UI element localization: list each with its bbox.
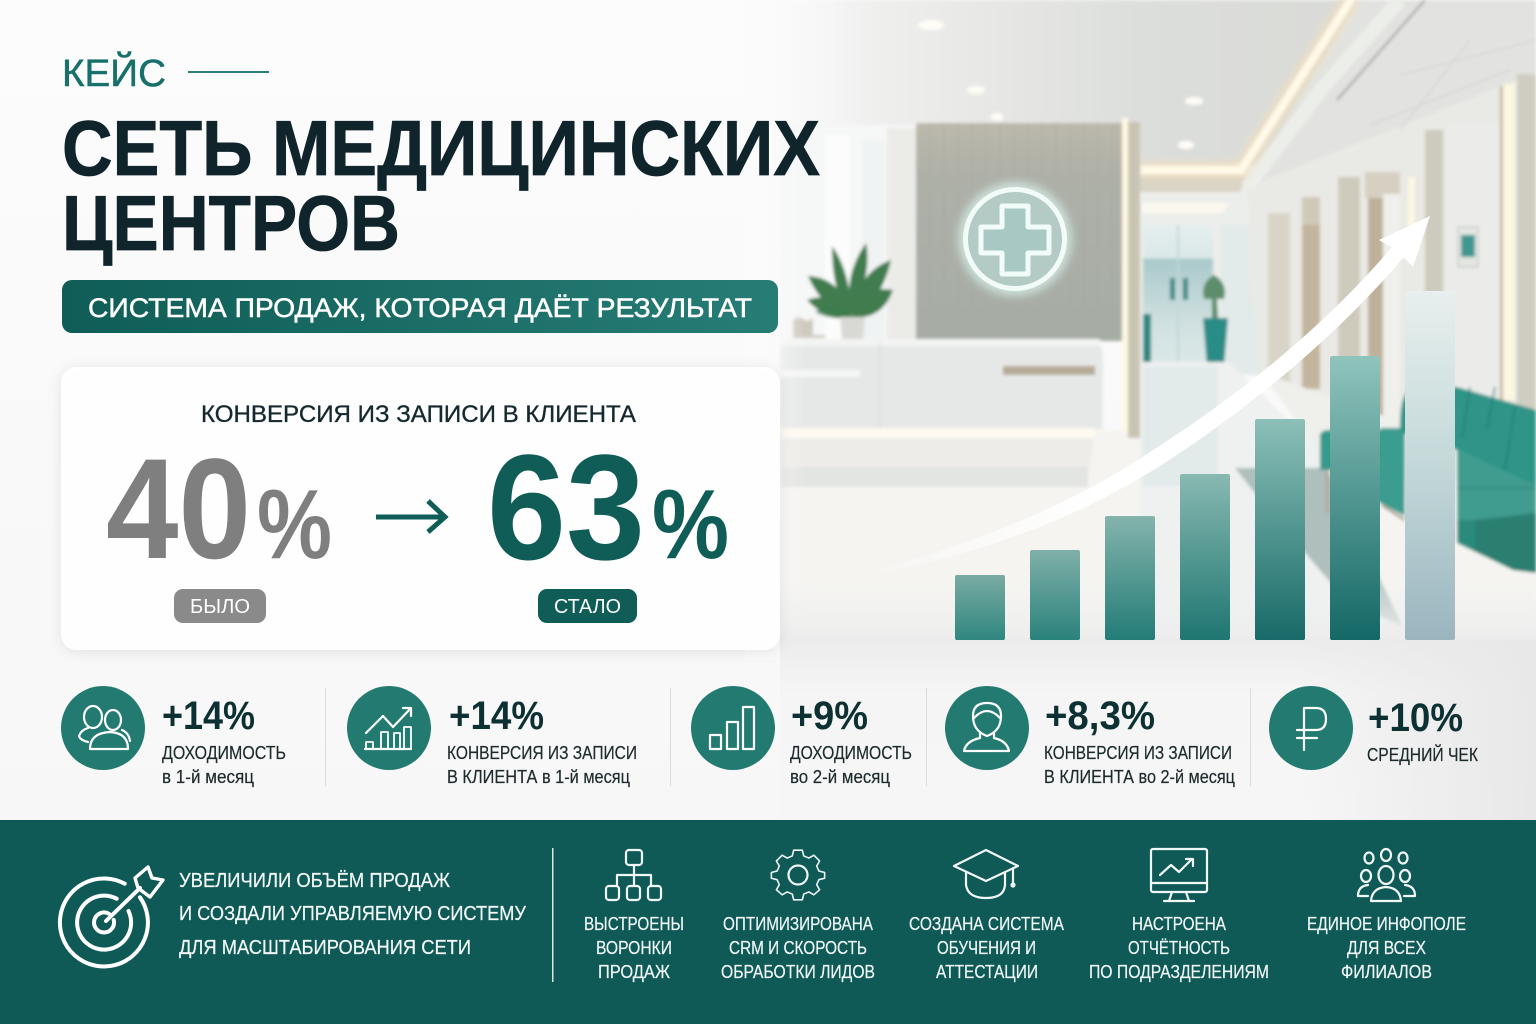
conversion heading: КОНВЕРСИЯ ИЗ ЗАПИСИ В КЛИЕНТА (201, 401, 636, 428)
icon: person (964, 703, 1009, 751)
item: sales funnels (584, 850, 684, 982)
heading label: case: КЕЙС (62, 50, 166, 95)
stat: conversion month 1: +14% (449, 694, 544, 738)
footer summary (179, 870, 526, 959)
stat: conversion month 2: КОНВЕРСИЯ ИЗ ЗАПИСИ (1044, 743, 1232, 763)
after value (487, 423, 729, 591)
arrow between values (376, 501, 445, 532)
sign: medical cross (964, 188, 1066, 290)
stat: conversion month 1: В КЛИЕНТА в 1-й месяц (447, 767, 630, 787)
reception desk (780, 340, 1103, 429)
corridor plant (1203, 275, 1225, 319)
right wall (1247, 72, 1536, 470)
stat: conversion month 1: КОНВЕРСИЯ ИЗ ЗАПИСИ (447, 743, 637, 763)
icon: bars (710, 707, 754, 749)
item: training (909, 850, 1064, 982)
background photo: clinic interior (760, 0, 1536, 660)
left white wall (780, 125, 916, 345)
stat: revenue month 2: ДОХОДИМОСТЬ (790, 743, 912, 763)
corridor end wall (1139, 165, 1269, 375)
floor (780, 430, 1536, 660)
stat: revenue month 1: +14% (162, 694, 255, 738)
item: CRM: ОПТИМИЗИРОВАНА (723, 914, 873, 934)
title (62, 104, 820, 267)
item: CRM: ОБРАБОТКИ ЛИДОВ (721, 962, 875, 982)
item: reporting (1089, 849, 1269, 982)
item: shared information (1307, 849, 1466, 982)
footer summary: ДЛЯ МАСШТАБИРОВАНИЯ СЕТИ (179, 937, 471, 959)
ceiling (760, 0, 1536, 240)
icon: group of people (1358, 849, 1415, 901)
icon: ruble (1297, 708, 1326, 750)
title: ЦЕНТРОВ (62, 179, 400, 267)
feature wall (916, 123, 1128, 341)
bar chart (955, 291, 1455, 640)
item: sales funnels: ПРОДАЖ (598, 962, 670, 982)
icon: growth chart (365, 708, 411, 749)
icon: target (60, 867, 163, 966)
plant on desk (807, 243, 893, 318)
panel: conversion (61, 367, 780, 650)
item: sales funnels: ВОРОНКИ (596, 938, 672, 958)
stat: revenue month 2 (691, 686, 912, 787)
item: reporting: НАСТРОЕНА (1132, 914, 1226, 934)
stat: average check: СРЕДНИЙ ЧЕК (1367, 744, 1478, 765)
corridor glass door (1143, 225, 1213, 362)
item: training: СОЗДАНА СИСТЕМА (909, 914, 1064, 934)
badge: before (174, 589, 266, 623)
icon: gear (771, 850, 825, 900)
item: sales funnels: ВЫСТРОЕНЫ (584, 914, 684, 934)
stat: conversion month 2: +8,3% (1045, 694, 1155, 738)
item: shared information: ЕДИНОЕ ИНФОПОЛЕ (1307, 914, 1466, 934)
badge: after: СТАЛО (554, 596, 621, 618)
badge: after (538, 589, 637, 623)
item: CRM: CRM И СКОРОСТЬ (729, 938, 867, 958)
stat: average check: +10% (1368, 696, 1463, 740)
item: shared information: ДЛЯ ВСЕХ (1347, 938, 1426, 958)
stat: revenue month 1: ДОХОДИМОСТЬ (162, 743, 286, 763)
right wall doors and pillars (1268, 213, 1290, 384)
after value: 63 (487, 423, 645, 591)
title: СЕТЬ МЕДИЦИНСКИХ (62, 104, 820, 192)
stat: revenue month 2: во 2-й месяц (790, 767, 890, 787)
stat: revenue month 1: в 1-й месяц (162, 767, 254, 787)
badge: before: БЫЛО (190, 596, 250, 618)
item: training: ОБУЧЕНИЯ И (937, 938, 1036, 958)
after value: % (652, 469, 729, 579)
wall picture (1458, 227, 1478, 267)
growth arrow (850, 216, 1430, 578)
stat: conversion month 1 (347, 686, 637, 787)
icon: people (79, 706, 130, 749)
stat: conversion month 2 (945, 686, 1235, 787)
sofa (1320, 430, 1405, 516)
item: shared information: ФИЛИАЛОВ (1341, 962, 1432, 982)
footer summary: И СОЗДАЛИ УПРАВЛЯЕМУЮ СИСТЕМУ (179, 903, 526, 925)
right ceiling tiles (1247, 0, 1536, 187)
stat: average check (1269, 686, 1478, 770)
icon: org chart (606, 850, 661, 900)
footer summary: УВЕЛИЧИЛИ ОБЪЁМ ПРОДАЖ (179, 870, 450, 892)
spot lights (918, 20, 1203, 149)
grey mat (1235, 468, 1403, 627)
item: reporting: ОТЧЁТНОСТЬ (1128, 938, 1230, 958)
stat: conversion month 2: В КЛИЕНТА во 2-й месяц (1044, 767, 1235, 787)
background fades (745, 0, 855, 125)
item: training: АТТЕСТАЦИИ (936, 962, 1038, 982)
item: CRM (721, 850, 875, 982)
subtitle banner: СИСТЕМА ПРОДАЖ, КОТОРАЯ ДАЁТ РЕЗУЛЬТАТ (88, 293, 752, 323)
before value: % (257, 469, 332, 579)
subtitle banner (62, 280, 778, 333)
stat: revenue month 1 (61, 686, 286, 787)
item: reporting: ПО ПОДРАЗДЕЛЕНИЯМ (1089, 962, 1269, 982)
before value: 40 (106, 430, 251, 589)
icon: monitor (1151, 849, 1207, 901)
stat: revenue month 2: +9% (791, 694, 868, 738)
icon: graduation cap (954, 850, 1018, 898)
panel: results footer (0, 820, 1536, 1024)
cove ceiling light (1141, 0, 1352, 170)
